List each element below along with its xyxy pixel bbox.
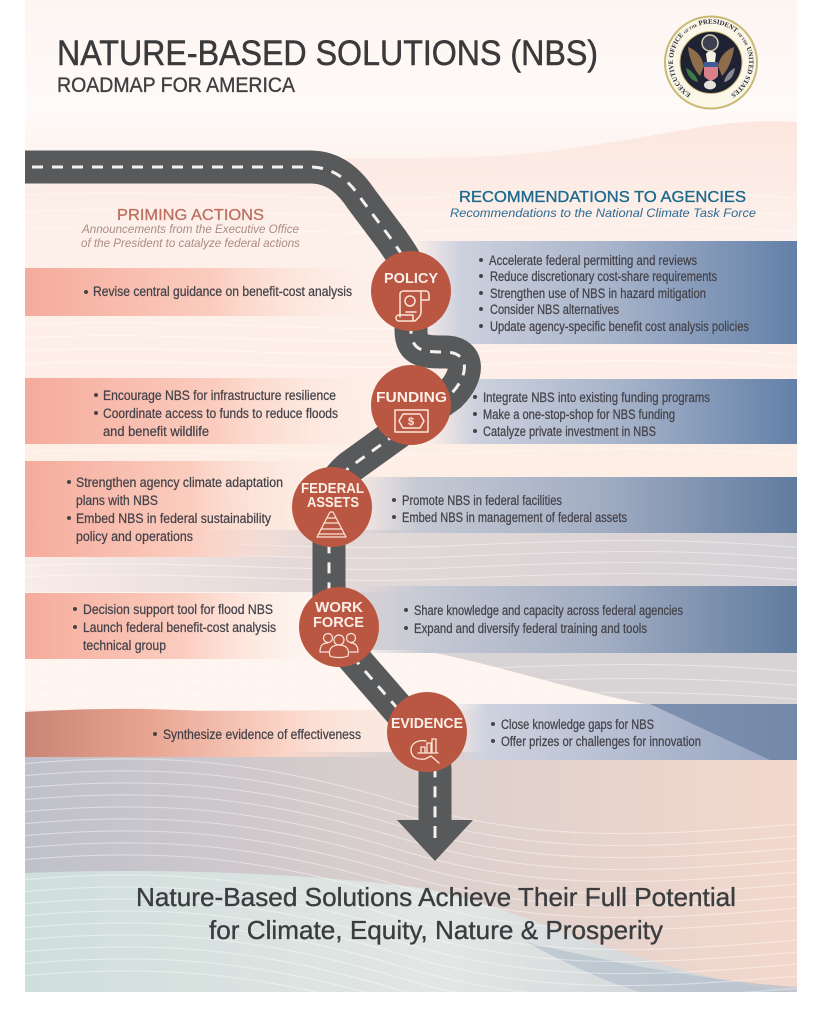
milestone: policy	[371, 251, 451, 331]
milestone: federal assets: FEDERAL	[301, 481, 364, 497]
text: workforce priming actions: Launch federal benefit-cost analysis	[83, 620, 276, 635]
text: evidence recommendations: Close knowledge gaps for NBS	[501, 717, 654, 732]
heading: priming actions: of the President to catalyze federal actions	[81, 238, 300, 250]
text: workforce priming actions: technical group	[83, 638, 166, 653]
heading: priming actions: PRIMING ACTIONS	[117, 207, 264, 224]
text: workforce priming actions	[73, 602, 276, 653]
milestone: federal assets: ASSETS	[307, 495, 359, 511]
text: policy recommendations: Update agency-specific benefit cost analysis policies	[490, 319, 749, 334]
text: federal assets priming actions: Strengthen agency climate adaptation	[76, 475, 283, 490]
text: federal assets priming actions: policy and operations	[76, 529, 193, 544]
text: workforce priming actions: Decision support tool for flood NBS	[83, 602, 273, 617]
text: federal assets priming actions: Embed NBS in federal sustainability	[76, 511, 271, 526]
panel: recommendation bands	[350, 241, 797, 760]
text: workforce recommendations: Share knowledge and capacity across federal agencies	[414, 603, 683, 618]
road	[25, 167, 464, 838]
milestone: evidence: EVIDENCE	[391, 716, 463, 732]
text: evidence recommendations	[491, 717, 701, 749]
icon: policy scroll	[396, 291, 429, 321]
milestone: funding	[371, 365, 451, 445]
text: workforce recommendations: Expand and diversify federal training and tools	[414, 621, 647, 636]
heading: recommendations to agencies: Recommendations to the National Climate Task Force	[450, 206, 756, 220]
text: evidence recommendations: Offer prizes or challenges for innovation	[501, 734, 701, 749]
text: policy recommendations: Accelerate federal permitting and reviews	[489, 253, 697, 268]
text: funding priming actions	[94, 388, 338, 439]
text: federal assets recommendations	[392, 493, 627, 525]
text: evidence priming actions: Synthesize evidence of effectiveness	[163, 727, 361, 742]
conclusion: Nature-Based Solutions Achieve Their Full Potential	[136, 882, 736, 912]
milestone: workforce: WORK	[315, 600, 364, 616]
panel: priming action bands	[25, 268, 395, 757]
text: funding recommendations: Make a one-stop-shop for NBS funding	[483, 407, 675, 422]
heading: recommendations to agencies: RECOMMENDATIONS TO AGENCIES	[459, 189, 746, 206]
text: federal assets priming actions	[67, 475, 283, 544]
heading: priming actions: Announcements from the Executive Office	[81, 224, 299, 236]
conclusion	[136, 882, 736, 945]
text: funding recommendations: Catalyze private investment in NBS	[483, 424, 656, 439]
conclusion: for Climate, Equity, Nature & Prosperity	[209, 915, 663, 945]
text: policy recommendations	[479, 253, 749, 334]
text: policy priming actions: Revise central guidance on benefit-cost analysis	[93, 284, 352, 299]
subtitle: ROADMAP FOR AMERICA	[57, 74, 295, 97]
arrow head	[397, 820, 473, 861]
text: federal assets recommendations: Embed NBS in management of federal assets	[402, 510, 627, 525]
milestone: workforce	[299, 587, 379, 667]
title: NATURE-BASED SOLUTIONS (NBS)	[57, 34, 598, 73]
icon: pyramid	[317, 512, 346, 537]
icon: presidential seal: EXECUTIVE OFFICE OF THE PRESIDENT OF THE UNITED STATES	[668, 19, 754, 98]
text: funding recommendations	[473, 390, 710, 439]
icon: dollar bill: $	[408, 416, 414, 428]
milestone: federal assets	[292, 467, 372, 547]
text: federal assets priming actions: plans with NBS	[76, 493, 158, 508]
text: federal assets recommendations: Promote NBS in federal facilities	[402, 493, 562, 508]
text: policy recommendations: Consider NBS alternatives	[490, 302, 619, 317]
heading: recommendations to agencies	[450, 189, 756, 220]
text: funding priming actions: Coordinate access to funds to reduce floods	[103, 406, 338, 421]
text: workforce recommendations	[404, 603, 683, 636]
text: funding recommendations: Integrate NBS into existing funding programs	[483, 390, 710, 405]
text: policy recommendations: Strengthen use of NBS in hazard mitigation	[490, 286, 706, 301]
text: funding priming actions: and benefit wildlife	[103, 424, 209, 439]
milestone: workforce: FORCE	[313, 615, 364, 631]
heading: priming actions	[81, 207, 300, 250]
milestone: policy: POLICY	[384, 271, 438, 287]
milestone: funding: FUNDING	[376, 390, 447, 406]
text: funding priming actions: Encourage NBS for infrastructure resilience	[103, 388, 336, 403]
milestone: evidence	[387, 692, 467, 772]
icon: magnifier with bars	[411, 739, 439, 763]
text: policy recommendations: Reduce discretionary cost-share requirements	[490, 269, 717, 284]
icon: people	[320, 634, 358, 658]
